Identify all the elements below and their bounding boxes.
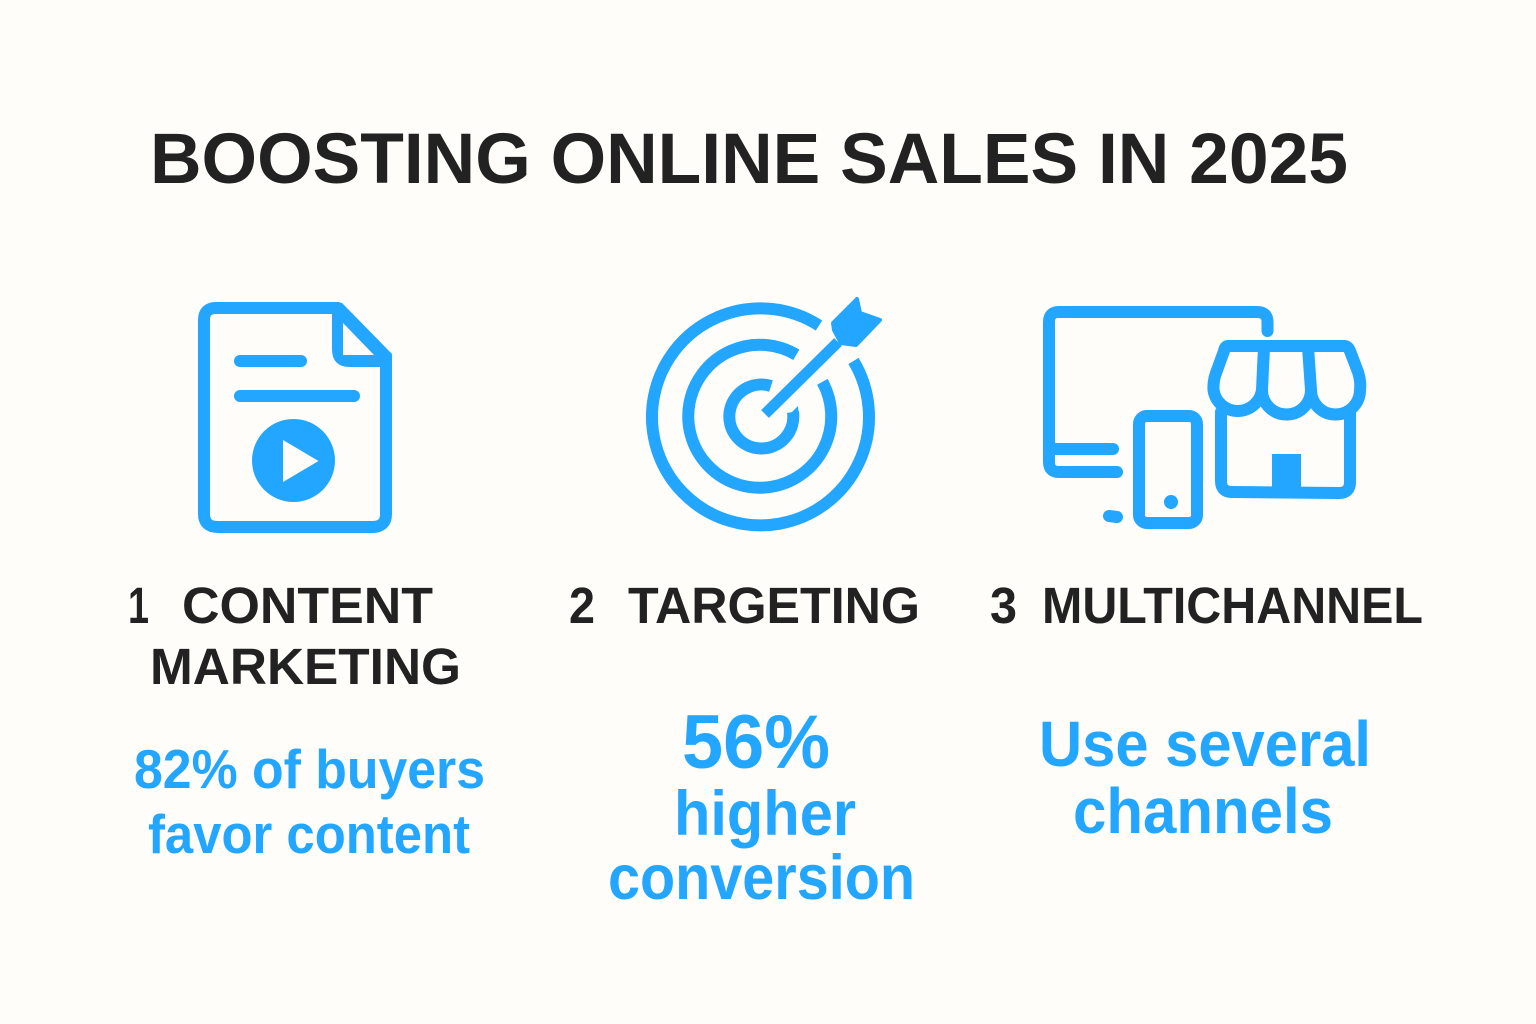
stat text: use several channels: Use several — [1039, 708, 1371, 780]
heading: 1 content marketing: MARKETING — [150, 638, 461, 695]
stat text: 56% higher conversion: 56% — [682, 700, 830, 785]
heading: 3 multichannel: MULTICHANNEL — [1042, 577, 1423, 634]
storefront — [1213, 346, 1360, 493]
stat text: 82% of buyers favor content: favor content — [148, 803, 470, 865]
title: BOOSTING ONLINE SALES IN 2025 — [150, 120, 1348, 199]
heading: 1 content marketing: 1 — [128, 577, 149, 634]
heading: 1 content marketing: CONTENT — [182, 577, 433, 634]
stat text: 56% higher conversion: higher — [674, 779, 856, 849]
stat text: use several channels — [1039, 708, 1371, 847]
panel: targeting — [569, 299, 920, 913]
heading: 3 multichannel: 3 — [990, 577, 1017, 634]
heading: 1 content marketing — [128, 577, 461, 695]
monitor — [1049, 312, 1268, 517]
panel: multichannel — [990, 312, 1423, 847]
heading: 2 targeting: 2 — [569, 577, 595, 634]
icon: document with play button — [204, 303, 392, 527]
icon: target with arrow — [652, 299, 880, 525]
stat text: 56% higher conversion: conversion — [608, 843, 915, 913]
phone — [1139, 416, 1197, 523]
stat text: use several channels: channels — [1073, 775, 1333, 847]
heading: 2 targeting: TARGETING — [628, 577, 920, 634]
stat text: 56% higher conversion — [608, 700, 915, 913]
panel: content marketing — [128, 303, 485, 865]
stat text: 82% of buyers favor content: 82% of buyers — [134, 738, 485, 800]
icon: monitor, phone and storefront — [1049, 312, 1360, 523]
stat text: 82% of buyers favor content — [134, 738, 485, 865]
